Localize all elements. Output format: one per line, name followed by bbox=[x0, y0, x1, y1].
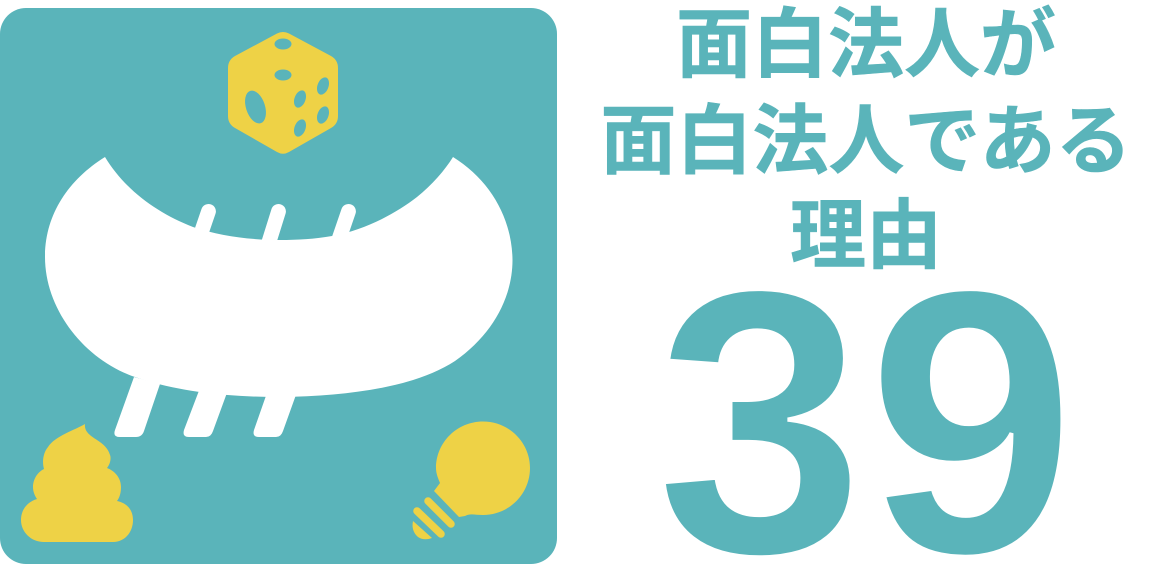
heading: title lines: 面白法人である bbox=[600, 100, 1132, 184]
heading: title lines: 理由 bbox=[790, 194, 942, 279]
icon: light bulb bbox=[413, 422, 530, 539]
heading: title lines: 面白法人が bbox=[676, 3, 1056, 88]
heading: title lines bbox=[600, 3, 1132, 279]
icon: dice bbox=[228, 32, 338, 154]
icon: poop bbox=[21, 424, 133, 542]
icon: canoe with ribs bbox=[45, 157, 512, 437]
panel: teal icon square bbox=[0, 8, 557, 564]
